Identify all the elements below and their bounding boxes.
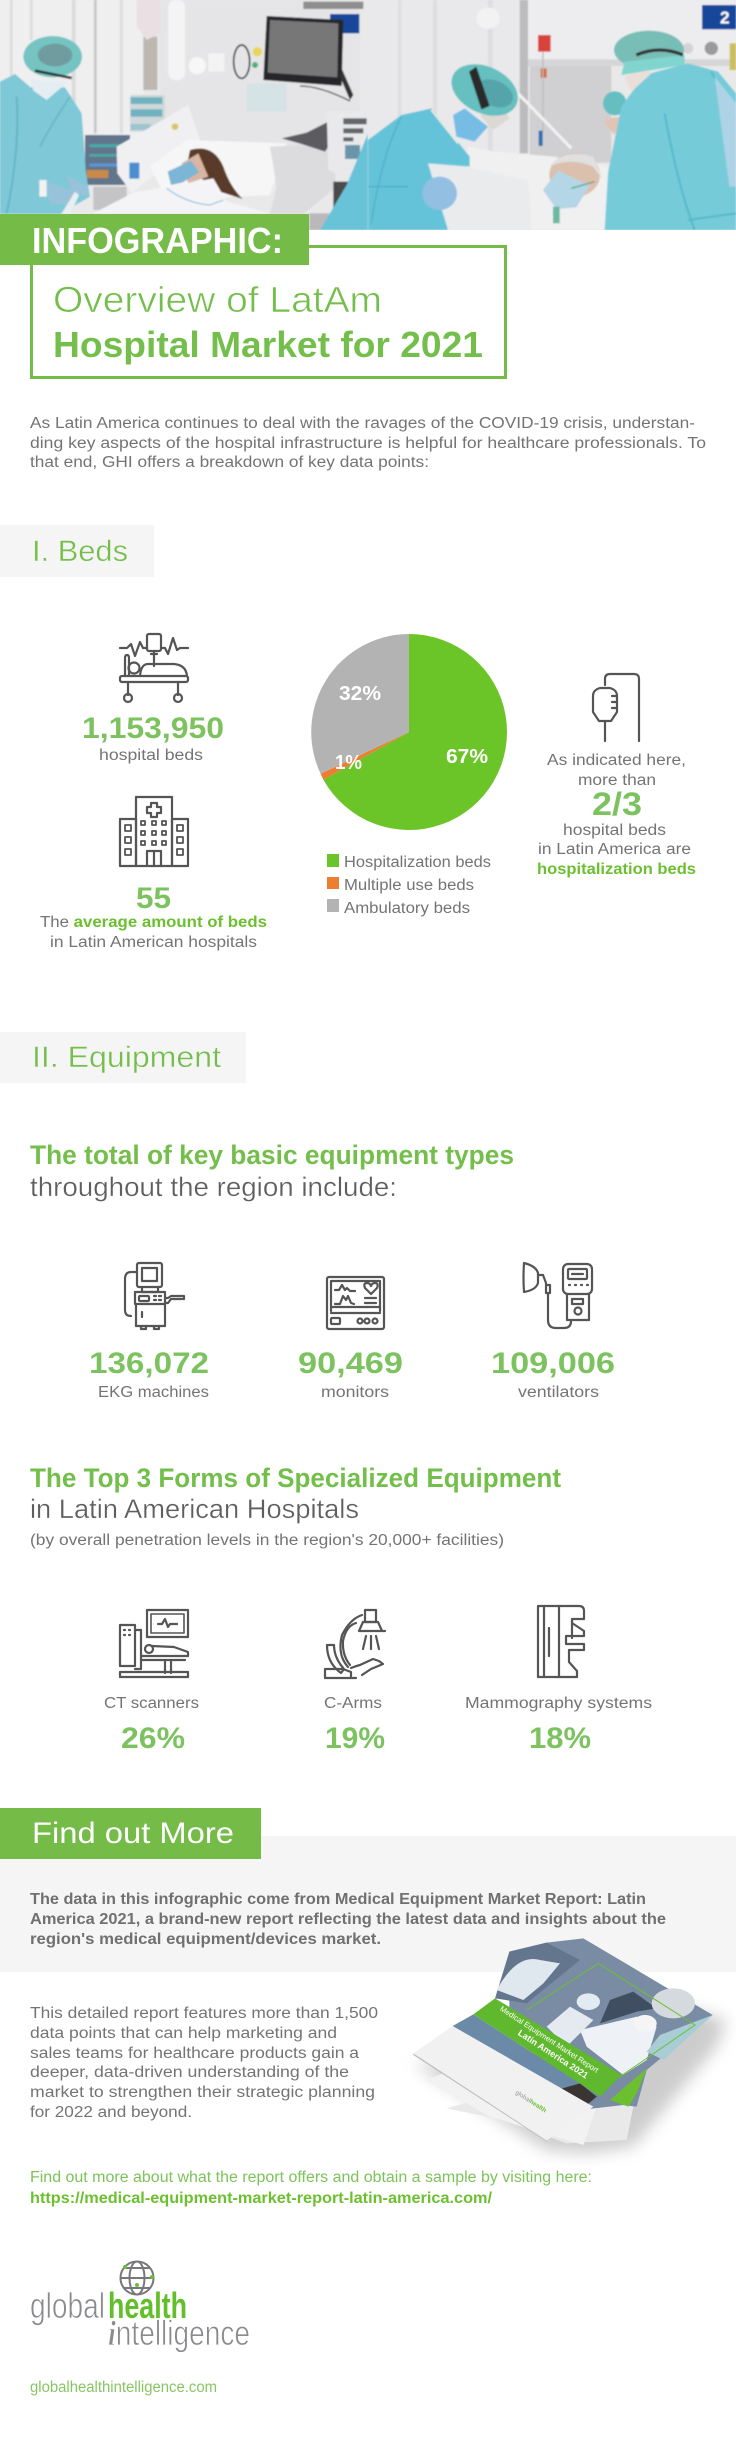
section heading: II. Equipment: II. Equipment	[32, 1041, 222, 1074]
callout: two thirds: hospital beds	[563, 822, 666, 839]
intro text	[30, 415, 706, 471]
stat: average beds	[40, 882, 267, 951]
logo: global health intelligence: global	[30, 2285, 105, 2326]
icon: mammography system	[538, 1606, 584, 1677]
body text: data points that can help marketing and	[30, 2025, 337, 2042]
callout: two thirds: As indicated here,	[547, 752, 686, 769]
heading: basic equipment: The total of key basic equipment types	[30, 1140, 514, 1170]
report summary text: America 2021, a brand-new report reflecting the latest data and insights about the	[30, 1911, 666, 1928]
stat: hospital beds: 1,153,950	[82, 712, 224, 745]
stats: basic equipment: monitors	[321, 1384, 389, 1401]
callout: two thirds: more than	[578, 772, 656, 789]
booklet cover logo: globalhealth	[514, 2089, 548, 2114]
pie chart: bed types: 32%	[339, 683, 381, 705]
icon: CT scanner	[120, 1610, 188, 1677]
pie legend	[327, 854, 491, 917]
stats: basic equipment: EKG machines	[98, 1384, 209, 1401]
pie legend: Ambulatory beds	[344, 900, 470, 917]
stat: hospital beds	[82, 712, 224, 764]
body text: market to strengthen their strategic planning	[30, 2084, 375, 2101]
body text	[30, 2005, 378, 2121]
report summary text	[30, 1891, 666, 1948]
pie legend: Hospitalization beds	[344, 854, 491, 871]
labels: specialized equipment: Mammography systems	[465, 1695, 652, 1712]
icon: IV drip	[593, 674, 639, 741]
INFOGRAPHIC banner	[0, 214, 309, 265]
logo: global health intelligence: intelligence	[108, 2314, 250, 2353]
callout: two thirds	[537, 752, 696, 878]
link text: Find out more about what the report offers and obtain a sample by visiting here:	[30, 2169, 592, 2186]
title box outline	[32, 246, 506, 378]
icon: hospital bed	[120, 634, 188, 702]
icon: hospital building	[120, 797, 188, 866]
labels: specialized equipment: C-Arms	[324, 1695, 382, 1712]
stats: basic equipment: 90,469	[298, 1347, 403, 1380]
heading: Find out More	[0, 1808, 261, 1859]
logo: global health intelligence: health	[108, 2285, 187, 2326]
section heading: I. Beds: I. Beds	[32, 535, 128, 568]
heading: specialized equipment: (by overall penetration levels in the region's 20,000+ facilities)	[30, 1532, 504, 1549]
website: globalhealthintelligence.com	[30, 2379, 217, 2396]
labels: specialized equipment: 19%	[325, 1722, 385, 1755]
heading: specialized equipment: in Latin American Hospitals	[30, 1494, 359, 1524]
heading: specialized equipment	[30, 1463, 561, 1549]
icon: globe	[120, 2262, 154, 2294]
stats: basic equipment: ventilators	[518, 1384, 599, 1401]
labels: specialized equipment: 26%	[121, 1722, 185, 1755]
image: stacked report booklets	[413, 1938, 727, 2153]
labels: specialized equipment: 18%	[529, 1722, 591, 1755]
pie chart: bed types: 1%	[335, 752, 362, 774]
icon: EKG machine	[125, 1263, 184, 1329]
intro text: ding key aspects of the hospital infrastructure is helpful for healthcare professionals. To	[30, 435, 706, 452]
report summary text: region's medical equipment/devices market.	[30, 1931, 381, 1948]
callout: two thirds: hospitalization beds	[537, 861, 696, 878]
intro text: that end, GHI offers a breakdown of key data points:	[30, 454, 429, 471]
stat: average beds: The average amount of beds	[40, 914, 267, 931]
icon: patient monitor	[327, 1277, 384, 1329]
heading: Find out More: Find out More	[32, 1817, 234, 1850]
body text: for 2022 and beyond.	[30, 2104, 192, 2121]
body text: deeper, data-driven understanding of the	[30, 2064, 349, 2081]
callout: two thirds: 2/3	[592, 786, 642, 822]
stats: basic equipment: 136,072	[89, 1347, 209, 1380]
INFOGRAPHIC banner: INFOGRAPHIC:	[32, 220, 283, 261]
pie legend: Multiple use beds	[344, 877, 474, 894]
stats: basic equipment	[89, 1347, 615, 1401]
report summary text: The data in this infographic come from Medical Equipment Market Report: Latin	[30, 1891, 646, 1908]
labels: specialized equipment: CT scanners	[104, 1695, 199, 1712]
room number: 2	[720, 7, 730, 27]
body text: sales teams for healthcare products gain a	[30, 2045, 359, 2062]
heading: specialized equipment: The Top 3 Forms of Specialized Equipment	[30, 1463, 561, 1493]
intro text: As Latin America continues to deal with the ravages of the COVID-19 crisis, understan-	[30, 415, 695, 432]
heading: basic equipment: throughout the region include:	[30, 1172, 397, 1202]
title: Overview of LatAm	[53, 279, 382, 320]
icon: C-arm	[325, 1610, 385, 1678]
hero photo: hospital ward	[0, 0, 736, 230]
callout: two thirds: in Latin America are	[538, 841, 691, 858]
body text: This detailed report features more than 1,500	[30, 2005, 378, 2022]
pie chart: bed types	[311, 634, 507, 830]
stat: hospital beds: hospital beds	[99, 747, 203, 764]
title: Hospital Market for 2021	[53, 324, 483, 365]
logo: global health intelligence	[30, 2262, 250, 2353]
icon: ventilator	[524, 1263, 592, 1328]
link text: https://medical-equipment-market-report-latin-america.com/	[30, 2190, 493, 2207]
panel: find out more band	[0, 1836, 736, 1972]
stat: average beds: in Latin American hospitals	[50, 934, 257, 951]
section heading: I. Beds	[0, 525, 154, 577]
booklet cover title: Latin America 2021	[516, 2028, 590, 2080]
booklet cover title: Medical Equipment Market Report	[498, 2004, 601, 2075]
stat: average beds: 55	[136, 882, 171, 915]
stats: basic equipment: 109,006	[491, 1347, 615, 1380]
pie chart: bed types: 67%	[446, 746, 488, 768]
heading: basic equipment	[30, 1140, 514, 1202]
section heading: II. Equipment	[0, 1032, 246, 1083]
link text	[30, 2169, 592, 2207]
title	[53, 279, 483, 365]
labels: specialized equipment	[104, 1695, 652, 1755]
